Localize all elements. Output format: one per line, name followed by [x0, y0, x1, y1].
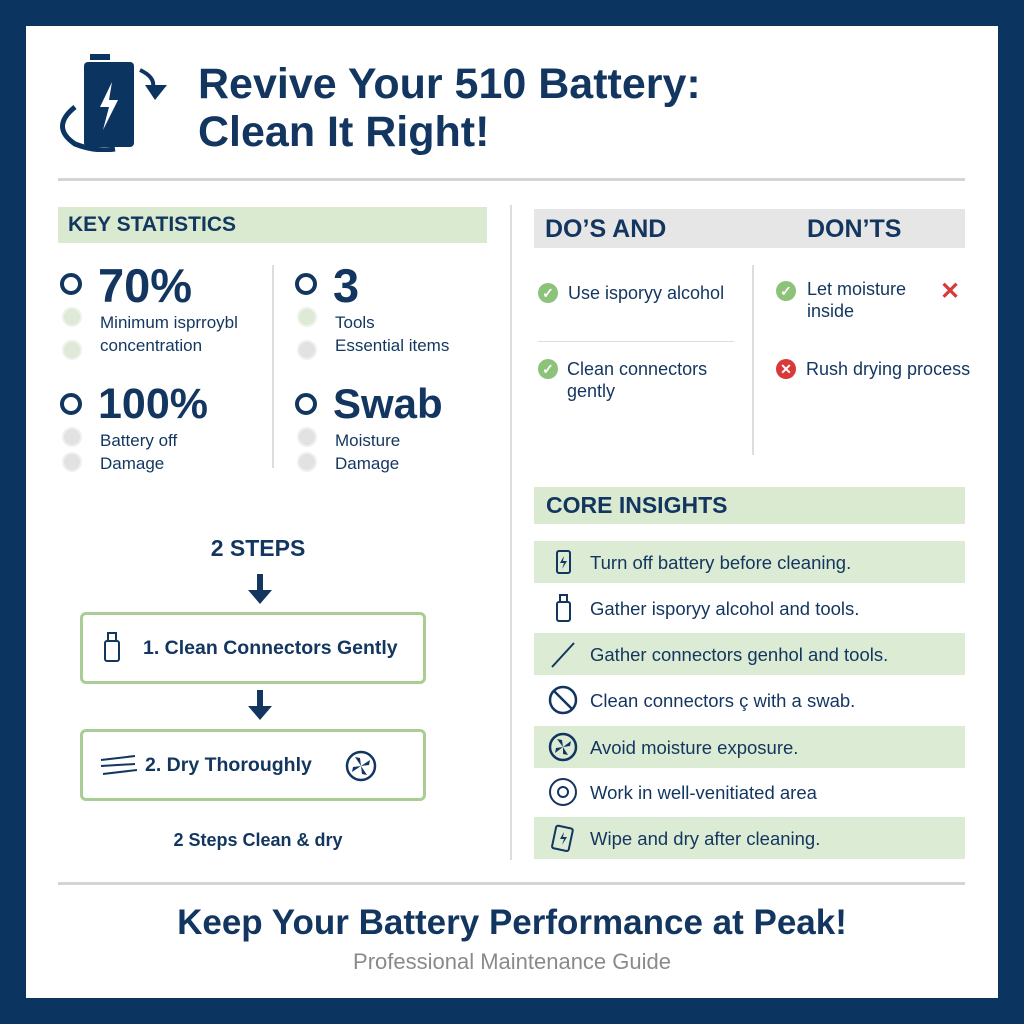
title: Revive Your 510 Battery: [198, 60, 701, 108]
stat swab [295, 380, 443, 473]
text: Gather connectors genhol and tools. [590, 644, 888, 665]
do: clean connectors [538, 359, 707, 401]
do: clean connectors: gently [567, 381, 615, 401]
panel: key statistics [58, 207, 487, 473]
step 2 [80, 729, 426, 801]
stat 100%: 100% [98, 380, 208, 428]
step 2: 2. Dry Thoroughly [145, 754, 312, 776]
heading: key statistics: KEY STATISTICS [68, 213, 236, 236]
do: alcohol: ✓ [542, 285, 554, 301]
don't: rush: ✕ [780, 361, 792, 377]
stat swab: Moisture [335, 431, 400, 450]
step 1 [80, 612, 426, 684]
steps heading: 2 STEPS [211, 535, 305, 561]
don't: rush: Rush drying process [806, 359, 970, 379]
stat 3 [295, 259, 449, 360]
steps caption: 2 Steps Clean & dry [173, 830, 343, 850]
step 1: 1. Clean Connectors Gently [143, 637, 398, 659]
title: Clean It Right! [198, 108, 489, 156]
heading: key statistics [58, 207, 487, 243]
text: Wipe and dry after cleaning. [590, 828, 820, 849]
insight rows: Turn off battery before cleaning. [590, 552, 851, 573]
heading: core insights [534, 487, 965, 524]
don't: moisture: Let moisture [807, 279, 906, 299]
don't: moisture: ✕ [940, 278, 960, 305]
text: Avoid moisture exposure. [590, 737, 798, 758]
heading: core insights: CORE INSIGHTS [546, 492, 727, 518]
don't: moisture [776, 278, 960, 321]
stat 70% [60, 259, 238, 360]
stat 100%: Battery off [100, 431, 177, 450]
stat swab: Swab [333, 380, 443, 427]
stat 70%: 70% [98, 259, 192, 312]
stat 70%: concentration [100, 336, 202, 355]
do: clean connectors: Clean connectors [567, 359, 707, 379]
header icon: battery [60, 54, 167, 152]
stat 3: Tools [335, 313, 375, 332]
arrow down [248, 690, 272, 720]
stat 100% [60, 380, 208, 473]
stat 3: Essential items [335, 336, 449, 355]
don't: moisture: ✓ [780, 283, 792, 299]
stat 100%: Damage [100, 454, 164, 473]
insight rows [534, 541, 965, 583]
footer title: Keep Your Battery Performance at Peak! [177, 903, 847, 942]
footer subtitle: Professional Maintenance Guide [353, 949, 671, 974]
panel: steps [80, 535, 426, 850]
do: clean connectors: ✓ [542, 361, 554, 377]
heading: do's and don'ts: DON’TS [807, 215, 901, 243]
text: Work in well-venitiated area [590, 782, 817, 803]
text: Gather isporyy alcohol and tools. [590, 598, 859, 619]
stat swab: Damage [335, 454, 399, 473]
don't: moisture: inside [807, 301, 854, 321]
heading: do's and don'ts: DO’S AND [545, 215, 666, 243]
arrow down [248, 574, 272, 604]
title [198, 60, 701, 156]
do: alcohol: Use isporyy alcohol [568, 283, 724, 303]
panel: do's and don'ts [534, 209, 970, 455]
stat 70%: Minimum isprroybl [100, 313, 238, 332]
stat 3: 3 [333, 259, 359, 312]
text: Clean connectors ç with a swab. [590, 690, 855, 711]
heading: do's and don'ts [534, 209, 965, 248]
